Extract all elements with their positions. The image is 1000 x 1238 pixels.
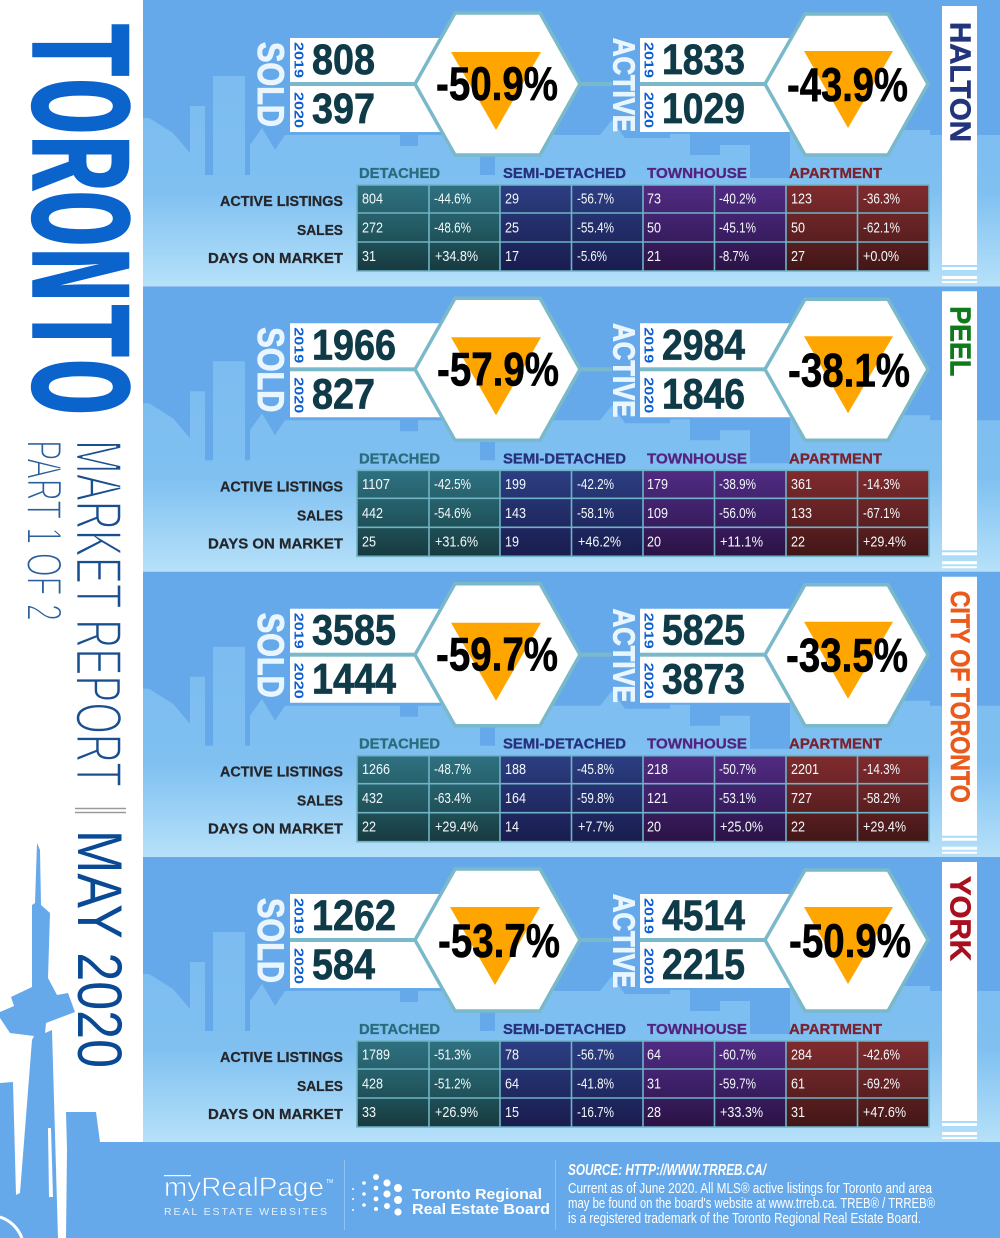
data table: 804 (362, 190, 383, 208)
data table: 14 (505, 819, 519, 836)
data table: +31.6% (435, 533, 478, 550)
column headings: TOWNHOUSE (647, 737, 747, 753)
data table: -62.1% (863, 220, 900, 236)
column headings: DETACHED (359, 737, 440, 753)
data table: -5.6% (577, 248, 607, 265)
data table: +29.4% (863, 819, 906, 836)
data table: -41.8% (577, 1076, 614, 1092)
data table: 29 (505, 190, 519, 208)
footer divider (555, 1160, 556, 1230)
active boxes (640, 38, 795, 132)
connector (580, 938, 612, 942)
panel: city of toronto (143, 572, 1000, 857)
hexagon (415, 298, 580, 440)
region name: HALTON (944, 22, 976, 142)
divider (290, 367, 425, 371)
data table: 121 (647, 790, 668, 807)
active change hexagon (765, 14, 928, 155)
data table: 20 (647, 819, 661, 836)
sold figures (250, 892, 445, 989)
year 2019: 2019 (292, 327, 306, 363)
data table: 199 (505, 476, 526, 493)
skyline (143, 361, 1000, 571)
tower base highlight (0, 1217, 22, 1238)
year 2020: 2020 (292, 663, 306, 699)
divider (640, 82, 766, 86)
skyline (143, 647, 1000, 857)
data table: 1266 (362, 761, 390, 778)
data table: -45.1% (719, 220, 756, 236)
data table: 17 (505, 248, 519, 265)
hexagon (415, 869, 580, 1011)
active boxes (640, 894, 795, 988)
data table: +34.8% (435, 248, 478, 265)
label: active: ACTIVE (606, 323, 642, 417)
column headings (359, 451, 882, 467)
data table: -44.6% (434, 190, 471, 208)
year 2020: 2020 (642, 377, 656, 413)
hexagon (765, 585, 928, 726)
data table: -56.0% (719, 505, 756, 522)
label: active: ACTIVE (606, 38, 642, 132)
row labels: ACTIVE LISTINGS (220, 479, 343, 495)
data table: 61 (791, 1076, 805, 1092)
percent: -50.9% (436, 57, 558, 110)
data table: -69.2% (863, 1076, 900, 1092)
data table: 28 (647, 1104, 661, 1121)
subtitle: market report: MARKET REPORT (62, 440, 136, 787)
panel: peel (143, 286, 1000, 571)
logo: toronto regional real estate board: Real Estate Board (412, 1201, 550, 1218)
value 2019: 1966 (312, 321, 396, 369)
sold boxes (290, 609, 445, 703)
percent: -38.1% (788, 343, 910, 396)
sold boxes (290, 894, 445, 988)
data table: +0.0% (863, 248, 899, 265)
region tab (942, 862, 977, 1139)
footer band with cn tower silhouette (0, 843, 1000, 1238)
data table: -48.7% (434, 761, 471, 778)
divider (290, 82, 425, 86)
column headings (359, 1022, 882, 1038)
active boxes (640, 609, 795, 703)
label: sold: SOLD (250, 898, 291, 983)
column headings: TOWNHOUSE (647, 451, 747, 467)
row labels: DAYS ON MARKET (208, 822, 343, 838)
year 2020: 2020 (642, 92, 656, 128)
data table: 25 (505, 220, 519, 236)
data table: 143 (505, 505, 526, 522)
data table: -53.1% (719, 790, 756, 807)
data table: +11.1% (720, 533, 763, 550)
region tab (942, 291, 977, 568)
year 2019: 2019 (642, 898, 656, 934)
row labels: SALES (297, 223, 343, 239)
value 2019: 3585 (312, 607, 396, 655)
row labels (208, 1050, 343, 1123)
active change hexagon (765, 299, 928, 440)
divider (290, 938, 425, 942)
down triangle (451, 52, 541, 130)
percent: -59.7% (436, 628, 558, 681)
hexagon (765, 870, 928, 1011)
value 2020: 1444 (312, 656, 396, 704)
data table (357, 756, 929, 842)
percent: -33.5% (786, 629, 908, 682)
data table: 73 (647, 190, 661, 208)
value 2020: 1846 (662, 370, 745, 418)
data table: -16.7% (577, 1104, 614, 1121)
value 2020: 3873 (662, 656, 745, 704)
down triangle (451, 623, 541, 701)
data table: +47.6% (863, 1104, 906, 1121)
tower highlight sliver (48, 1128, 53, 1197)
divider (640, 653, 766, 657)
data table: 19 (505, 533, 519, 550)
data table: 64 (647, 1046, 661, 1064)
column headings: DETACHED (359, 1022, 440, 1038)
value 2019: 4514 (662, 892, 745, 940)
column headings: APARTMENT (789, 451, 882, 467)
panel background (143, 572, 1000, 857)
data table: 22 (791, 819, 805, 836)
icon: cn tower and city silhouette (0, 843, 143, 1238)
data table: 284 (791, 1046, 812, 1064)
connector (580, 653, 612, 657)
data table: -40.2% (719, 190, 756, 208)
data table (357, 470, 929, 556)
year 2019: 2019 (642, 42, 656, 78)
down triangle (450, 907, 540, 985)
data table: 123 (791, 190, 812, 208)
skyline (143, 76, 1000, 286)
data table: +29.4% (863, 533, 906, 550)
data table: -56.7% (577, 190, 614, 208)
data table: 25 (362, 533, 376, 550)
data table: +46.2% (578, 533, 621, 550)
year 2019: 2019 (292, 613, 306, 649)
divider (640, 938, 766, 942)
data table: -58.2% (863, 790, 900, 807)
panel: halton (143, 0, 1000, 286)
down triangle (804, 51, 893, 128)
row labels: DAYS ON MARKET (208, 536, 343, 552)
percent: -57.9% (437, 342, 559, 395)
data table: -38.9% (719, 476, 756, 493)
down triangle (804, 907, 893, 984)
source note: SOURCE: HTTP://WWW.TRREB.CA/ (568, 1162, 767, 1179)
data table: 33 (362, 1104, 376, 1121)
sold figures (250, 321, 445, 418)
row labels: SALES (297, 508, 343, 524)
value 2019: 2984 (662, 321, 745, 369)
data table: -45.8% (577, 761, 614, 778)
logo: myrealpage (164, 1172, 333, 1218)
divider (640, 367, 766, 371)
data table: 428 (362, 1076, 383, 1092)
panel background (143, 286, 1000, 571)
value 2020: 827 (312, 370, 375, 418)
label: active: ACTIVE (606, 894, 642, 988)
data table: +25.0% (720, 819, 763, 836)
data table: 50 (791, 220, 805, 236)
data table: 272 (362, 220, 383, 236)
sold figures (250, 36, 445, 133)
value 2019: 808 (312, 36, 375, 84)
active boxes (640, 323, 795, 417)
data table: 188 (505, 761, 526, 778)
column headings: APARTMENT (789, 737, 882, 753)
row labels: SALES (297, 1079, 343, 1095)
data table (357, 185, 929, 271)
data table: -59.7% (719, 1076, 756, 1092)
column headings: TOWNHOUSE (647, 1022, 747, 1038)
data table: 64 (505, 1076, 519, 1092)
row labels: ACTIVE LISTINGS (220, 765, 343, 781)
data table: -60.7% (719, 1046, 756, 1064)
column headings: TOWNHOUSE (647, 166, 747, 182)
data table (357, 1041, 929, 1127)
data table: 361 (791, 476, 812, 493)
sold boxes (290, 323, 445, 417)
data table: -42.2% (577, 476, 614, 493)
data table: 20 (647, 533, 661, 550)
data table: -56.7% (577, 1046, 614, 1064)
hexagon (415, 584, 580, 726)
column headings: SEMI-DETACHED (503, 451, 626, 467)
data table: 442 (362, 505, 383, 522)
year 2019: 2019 (642, 613, 656, 649)
data table: 21 (647, 248, 661, 265)
column headings: APARTMENT (789, 1022, 882, 1038)
hexagon (765, 299, 928, 440)
data table: -59.8% (577, 790, 614, 807)
down triangle (451, 337, 541, 415)
column headings: SEMI-DETACHED (503, 737, 626, 753)
year 2020: 2020 (292, 92, 306, 128)
divider bars (75, 808, 126, 812)
row labels (208, 194, 343, 267)
percent: -43.9% (787, 58, 908, 111)
percent: -50.9% (789, 914, 911, 967)
organisation name: Toronto Regional (412, 1186, 542, 1203)
data table: +26.9% (435, 1104, 478, 1121)
data table: -51.2% (434, 1076, 471, 1092)
divider (290, 653, 425, 657)
value 2020: 584 (312, 941, 375, 989)
column headings: SEMI-DETACHED (503, 166, 626, 182)
data table: -51.3% (434, 1046, 471, 1064)
column headings: SEMI-DETACHED (503, 1022, 626, 1038)
data table: 2201 (791, 761, 819, 778)
sold figures (250, 607, 445, 704)
skyline (143, 932, 1000, 1142)
year 2020: 2020 (642, 663, 656, 699)
data table: 50 (647, 220, 661, 236)
active change hexagon (765, 870, 928, 1011)
region name: PEEL (944, 306, 976, 376)
subtitle: part 1 of 2: PART 1 OF 2 (16, 440, 72, 621)
row labels (208, 765, 343, 838)
logo: toronto regional real estate board (352, 1174, 550, 1218)
down triangle (804, 622, 893, 699)
data table: 1789 (362, 1046, 390, 1064)
row labels: DAYS ON MARKET (208, 1107, 343, 1123)
year 2019: 2019 (642, 327, 656, 363)
data table: -8.7% (719, 248, 749, 265)
data table: +29.4% (435, 819, 478, 836)
region name: YORK (944, 876, 976, 961)
region tab (942, 577, 977, 854)
logo: myrealpage: myRealPage (164, 1172, 324, 1202)
data table: +33.3% (720, 1104, 763, 1121)
data table: 31 (362, 248, 376, 265)
active figures (580, 607, 795, 704)
data table: -54.6% (434, 505, 471, 522)
data table: -36.3% (863, 190, 900, 208)
year 2020: 2020 (642, 948, 656, 984)
data table: 22 (362, 819, 376, 836)
data table: -42.6% (863, 1046, 900, 1064)
date: may 2020: MAY 2020 (64, 830, 134, 1068)
year 2019: 2019 (292, 42, 306, 78)
percent: -53.7% (438, 914, 560, 967)
data table: -14.3% (863, 476, 900, 493)
data table: -67.1% (863, 505, 900, 522)
data table: 218 (647, 761, 668, 778)
panel background (143, 857, 1000, 1142)
row labels: ACTIVE LISTINGS (220, 194, 343, 210)
dot mark (352, 1174, 402, 1216)
logo: myrealpage: TM (326, 1179, 333, 1185)
data table: -42.5% (434, 476, 471, 493)
data table: 31 (647, 1076, 661, 1092)
down triangle (804, 336, 893, 413)
label: sold: SOLD (250, 42, 291, 127)
connector (580, 82, 612, 86)
data table: 31 (791, 1104, 805, 1121)
data table: +7.7% (578, 819, 614, 836)
data table: 179 (647, 476, 668, 493)
hexagon (765, 14, 928, 155)
column headings (359, 166, 882, 182)
data table: 27 (791, 248, 805, 265)
footer divider (344, 1160, 345, 1230)
region name: CITY OF TORONTO (945, 591, 975, 803)
data table: -50.7% (719, 761, 756, 778)
column headings: DETACHED (359, 451, 440, 467)
sold change hexagon (415, 13, 580, 155)
sold change hexagon (415, 298, 580, 440)
data table: 78 (505, 1046, 519, 1064)
label: active: ACTIVE (606, 609, 642, 703)
row labels (208, 479, 343, 552)
active figures (580, 892, 795, 989)
year 2020: 2020 (292, 377, 306, 413)
hexagon (415, 13, 580, 155)
footer background (100, 1142, 1000, 1238)
sold change hexagon (415, 869, 580, 1011)
value 2019: 1833 (662, 36, 745, 84)
active change hexagon (765, 585, 928, 726)
year 2020: 2020 (292, 948, 306, 984)
panel background (143, 0, 1000, 286)
value 2020: 397 (312, 85, 375, 133)
connector (580, 367, 612, 371)
label: sold: SOLD (250, 613, 291, 698)
row labels: SALES (297, 794, 343, 810)
value 2019: 1262 (312, 892, 396, 940)
data table: 109 (647, 505, 668, 522)
data table: -55.4% (577, 220, 614, 236)
row labels: DAYS ON MARKET (208, 251, 343, 267)
column headings: DETACHED (359, 166, 440, 182)
data table: -14.3% (863, 761, 900, 778)
data table: 22 (791, 533, 805, 550)
value 2020: 2215 (662, 941, 745, 989)
active figures (580, 321, 795, 418)
data table: 133 (791, 505, 812, 522)
column headings: APARTMENT (789, 166, 882, 182)
data table: -63.4% (434, 790, 471, 807)
data table: 164 (505, 790, 526, 807)
data table: 432 (362, 790, 383, 807)
active figures (580, 36, 795, 133)
data table: 1107 (362, 476, 390, 493)
row labels: ACTIVE LISTINGS (220, 1050, 343, 1066)
source note (568, 1162, 935, 1227)
panel: york (143, 857, 1000, 1142)
label: sold: SOLD (250, 327, 291, 412)
data table: 15 (505, 1104, 519, 1121)
data table: -48.6% (434, 220, 471, 236)
sold boxes (290, 38, 445, 132)
value 2020: 1029 (662, 85, 745, 133)
region tab (942, 6, 977, 283)
column headings (359, 737, 882, 753)
year 2019: 2019 (292, 898, 306, 934)
data table: -58.1% (577, 505, 614, 522)
sold change hexagon (415, 584, 580, 726)
value 2019: 5825 (662, 607, 745, 655)
data table: 727 (791, 790, 812, 807)
logo: myrealpage: REAL ESTATE WEBSITES (164, 1206, 327, 1218)
